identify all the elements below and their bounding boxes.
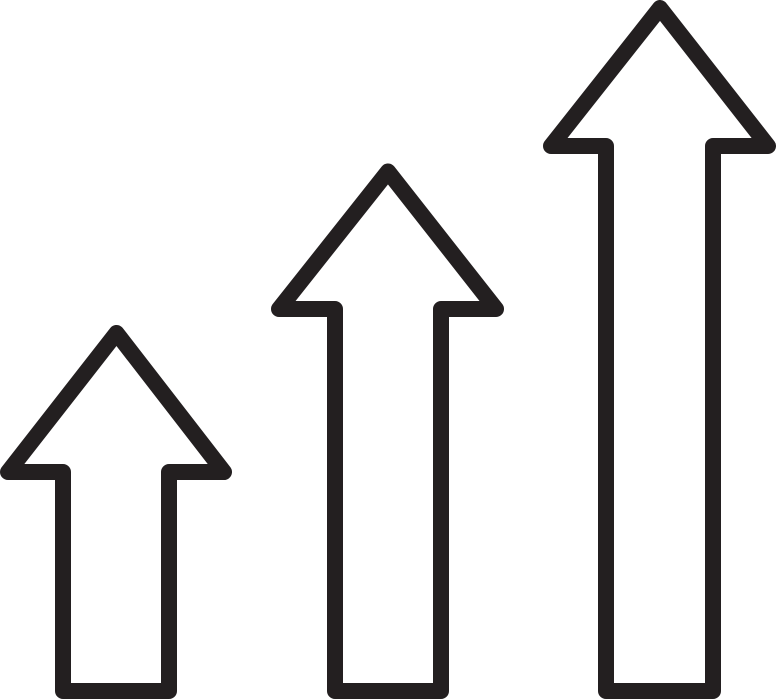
- icon: small left arrow: [8, 333, 224, 691]
- icon: medium middle arrow: [279, 172, 496, 691]
- icon: tall right arrow: [551, 8, 768, 691]
